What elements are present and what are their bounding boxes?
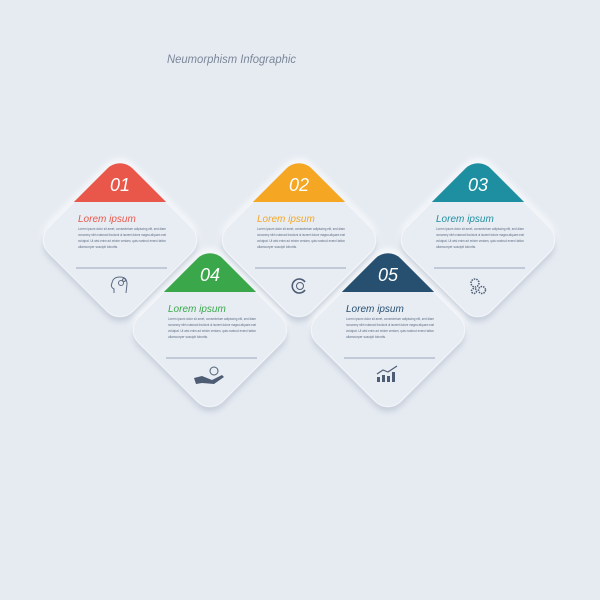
- panel: 01: [36, 156, 204, 324]
- panel: 04: [126, 246, 294, 414]
- icon: head gears: [111, 277, 127, 293]
- panel: 02: 02: [289, 175, 309, 195]
- panel: 01: Lorem ipsum: [78, 214, 136, 225]
- panel: 04: 04: [200, 265, 220, 285]
- panel: 03: [394, 156, 562, 324]
- panel: 05: Lorem ipsum: [346, 304, 404, 315]
- title: Neumorphism Infographic: [167, 52, 296, 66]
- panel: 02: Lorem ipsum: [257, 214, 315, 225]
- icon: gears: [471, 279, 486, 294]
- icon: hand coin: [194, 367, 224, 384]
- panel: 05: [304, 246, 472, 414]
- panel: 01: 01: [110, 175, 130, 195]
- panel: 03: Lorem ipsum: [436, 214, 494, 225]
- panel: 04: Lorem ipsum: [168, 304, 226, 315]
- icon: clock arrow: [292, 279, 305, 293]
- panel: 02: [215, 156, 383, 324]
- panel: 05: 05: [378, 265, 399, 285]
- icon: bar chart: [377, 366, 397, 382]
- triangle 01: [74, 163, 166, 202]
- panel: 03: 03: [468, 175, 488, 195]
